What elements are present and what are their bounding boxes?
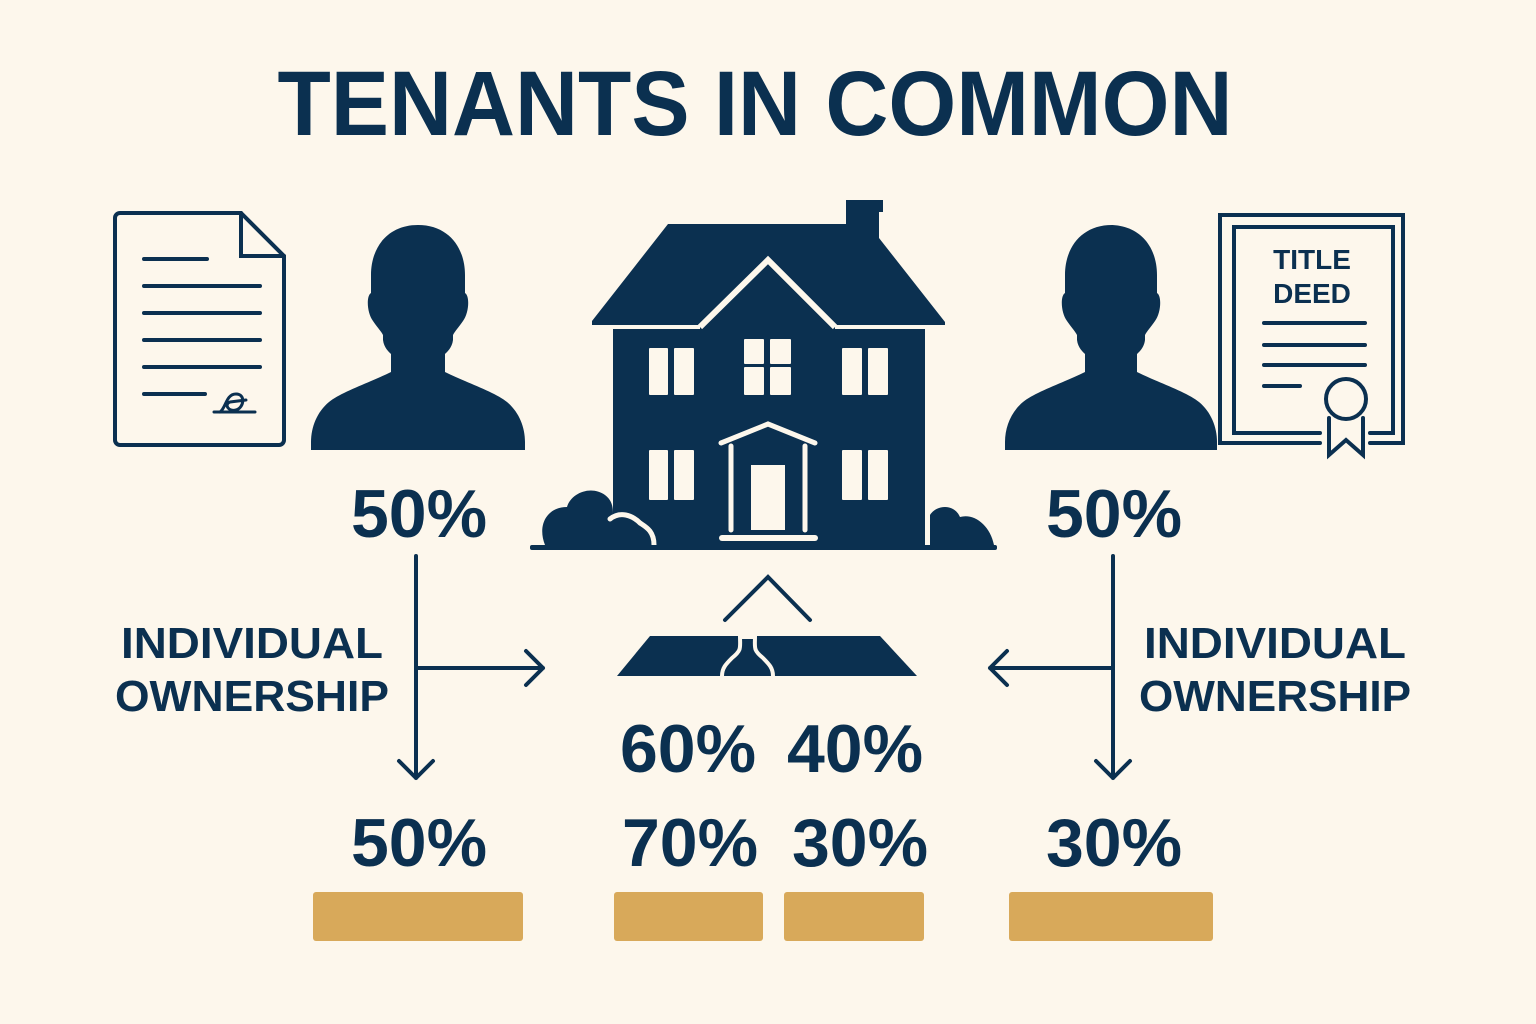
percentage: left owner 50%: 50% [351,476,487,552]
icon: person right [1005,225,1217,450]
arrows: left [399,556,543,778]
label: individual ownership right: OWNERSHIP [1139,672,1411,721]
icon: person left [311,225,525,450]
percentage: bottom left 50%: 50% [351,805,487,881]
percentages: center split [620,711,928,881]
percentages: center split: 60% [620,711,756,787]
icon: contract document [115,213,284,445]
percentage: right owner 50%: 50% [1046,476,1182,552]
label: individual ownership left: INDIVIDUAL [121,619,383,668]
label: individual ownership right [1139,619,1411,721]
percentages: center split: 40% [787,711,923,787]
icon: title deed certificate: DEED [1273,278,1351,309]
icon: title deed certificate: TITLE [1273,244,1351,275]
percentages: center split: 70% [622,805,758,881]
percentage: bottom right 30%: 30% [1046,805,1182,881]
title: TENANTS IN COMMON [278,53,1232,155]
bars: gold share bars [313,892,1213,941]
label: individual ownership right: INDIVIDUAL [1144,619,1406,668]
label: individual ownership left: OWNERSHIP [115,672,389,721]
label: individual ownership left [115,619,389,721]
arrows: right [990,556,1130,778]
icon: title deed certificate [1220,215,1403,455]
icon: split ground [617,577,917,676]
percentages: center split: 30% [792,805,928,881]
icon: house [530,200,997,550]
